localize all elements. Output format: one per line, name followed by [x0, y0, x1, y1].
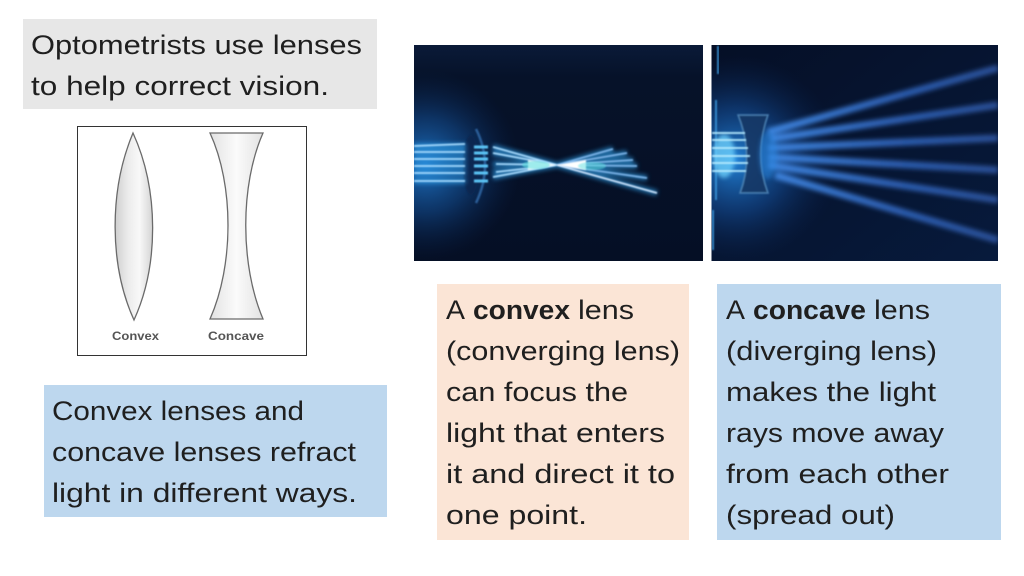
panel: concave lens explanation: from each other — [726, 459, 949, 489]
panel: convex lens explanation: (converging lens) — [446, 336, 680, 366]
panel: concave lens explanation: A — [726, 295, 745, 325]
panel: convex lens explanation: it and direct it to — [446, 459, 675, 489]
label: concave: Concave — [208, 329, 264, 343]
panel: concave lens explanation: concave — [753, 295, 866, 325]
panel: convex lens explanation — [437, 284, 689, 540]
panel: convex lens explanation: light that enters — [446, 418, 665, 448]
heading: optometrists use lenses: to help correct vision. — [31, 71, 329, 101]
panel: refraction note: concave lenses refract — [52, 437, 357, 467]
panel: convex lens explanation: A — [446, 295, 465, 325]
panel: concave lens explanation — [717, 284, 1001, 540]
panel: concave lens explanation: (spread out) — [726, 500, 895, 530]
panel: convex lens explanation: can focus the — [446, 377, 628, 407]
label: convex: Convex — [112, 329, 159, 343]
panel: concave lens explanation: (diverging lens) — [726, 336, 937, 366]
panel: refraction note: Convex lenses and — [52, 396, 304, 426]
panel: concave lens explanation: rays move away — [726, 418, 945, 448]
panel: refraction note — [44, 385, 387, 517]
heading: optometrists use lenses — [23, 19, 377, 109]
icon: concave lens shape — [210, 133, 263, 319]
photo: convex lens light rays — [414, 45, 703, 261]
panel: lens diagram — [78, 126, 306, 356]
panel: refraction note: light in different ways. — [52, 478, 357, 508]
panel: concave lens explanation: lens — [874, 295, 930, 325]
heading: optometrists use lenses: Optometrists use lenses — [31, 30, 362, 60]
panel: convex lens explanation: one point. — [446, 500, 587, 530]
panel: convex lens explanation: lens — [578, 295, 634, 325]
panel: convex lens explanation: convex — [473, 295, 570, 325]
photo: concave lens light rays — [712, 45, 998, 261]
icon: convex lens shape — [115, 133, 153, 320]
panel: concave lens explanation: makes the light — [726, 377, 937, 407]
